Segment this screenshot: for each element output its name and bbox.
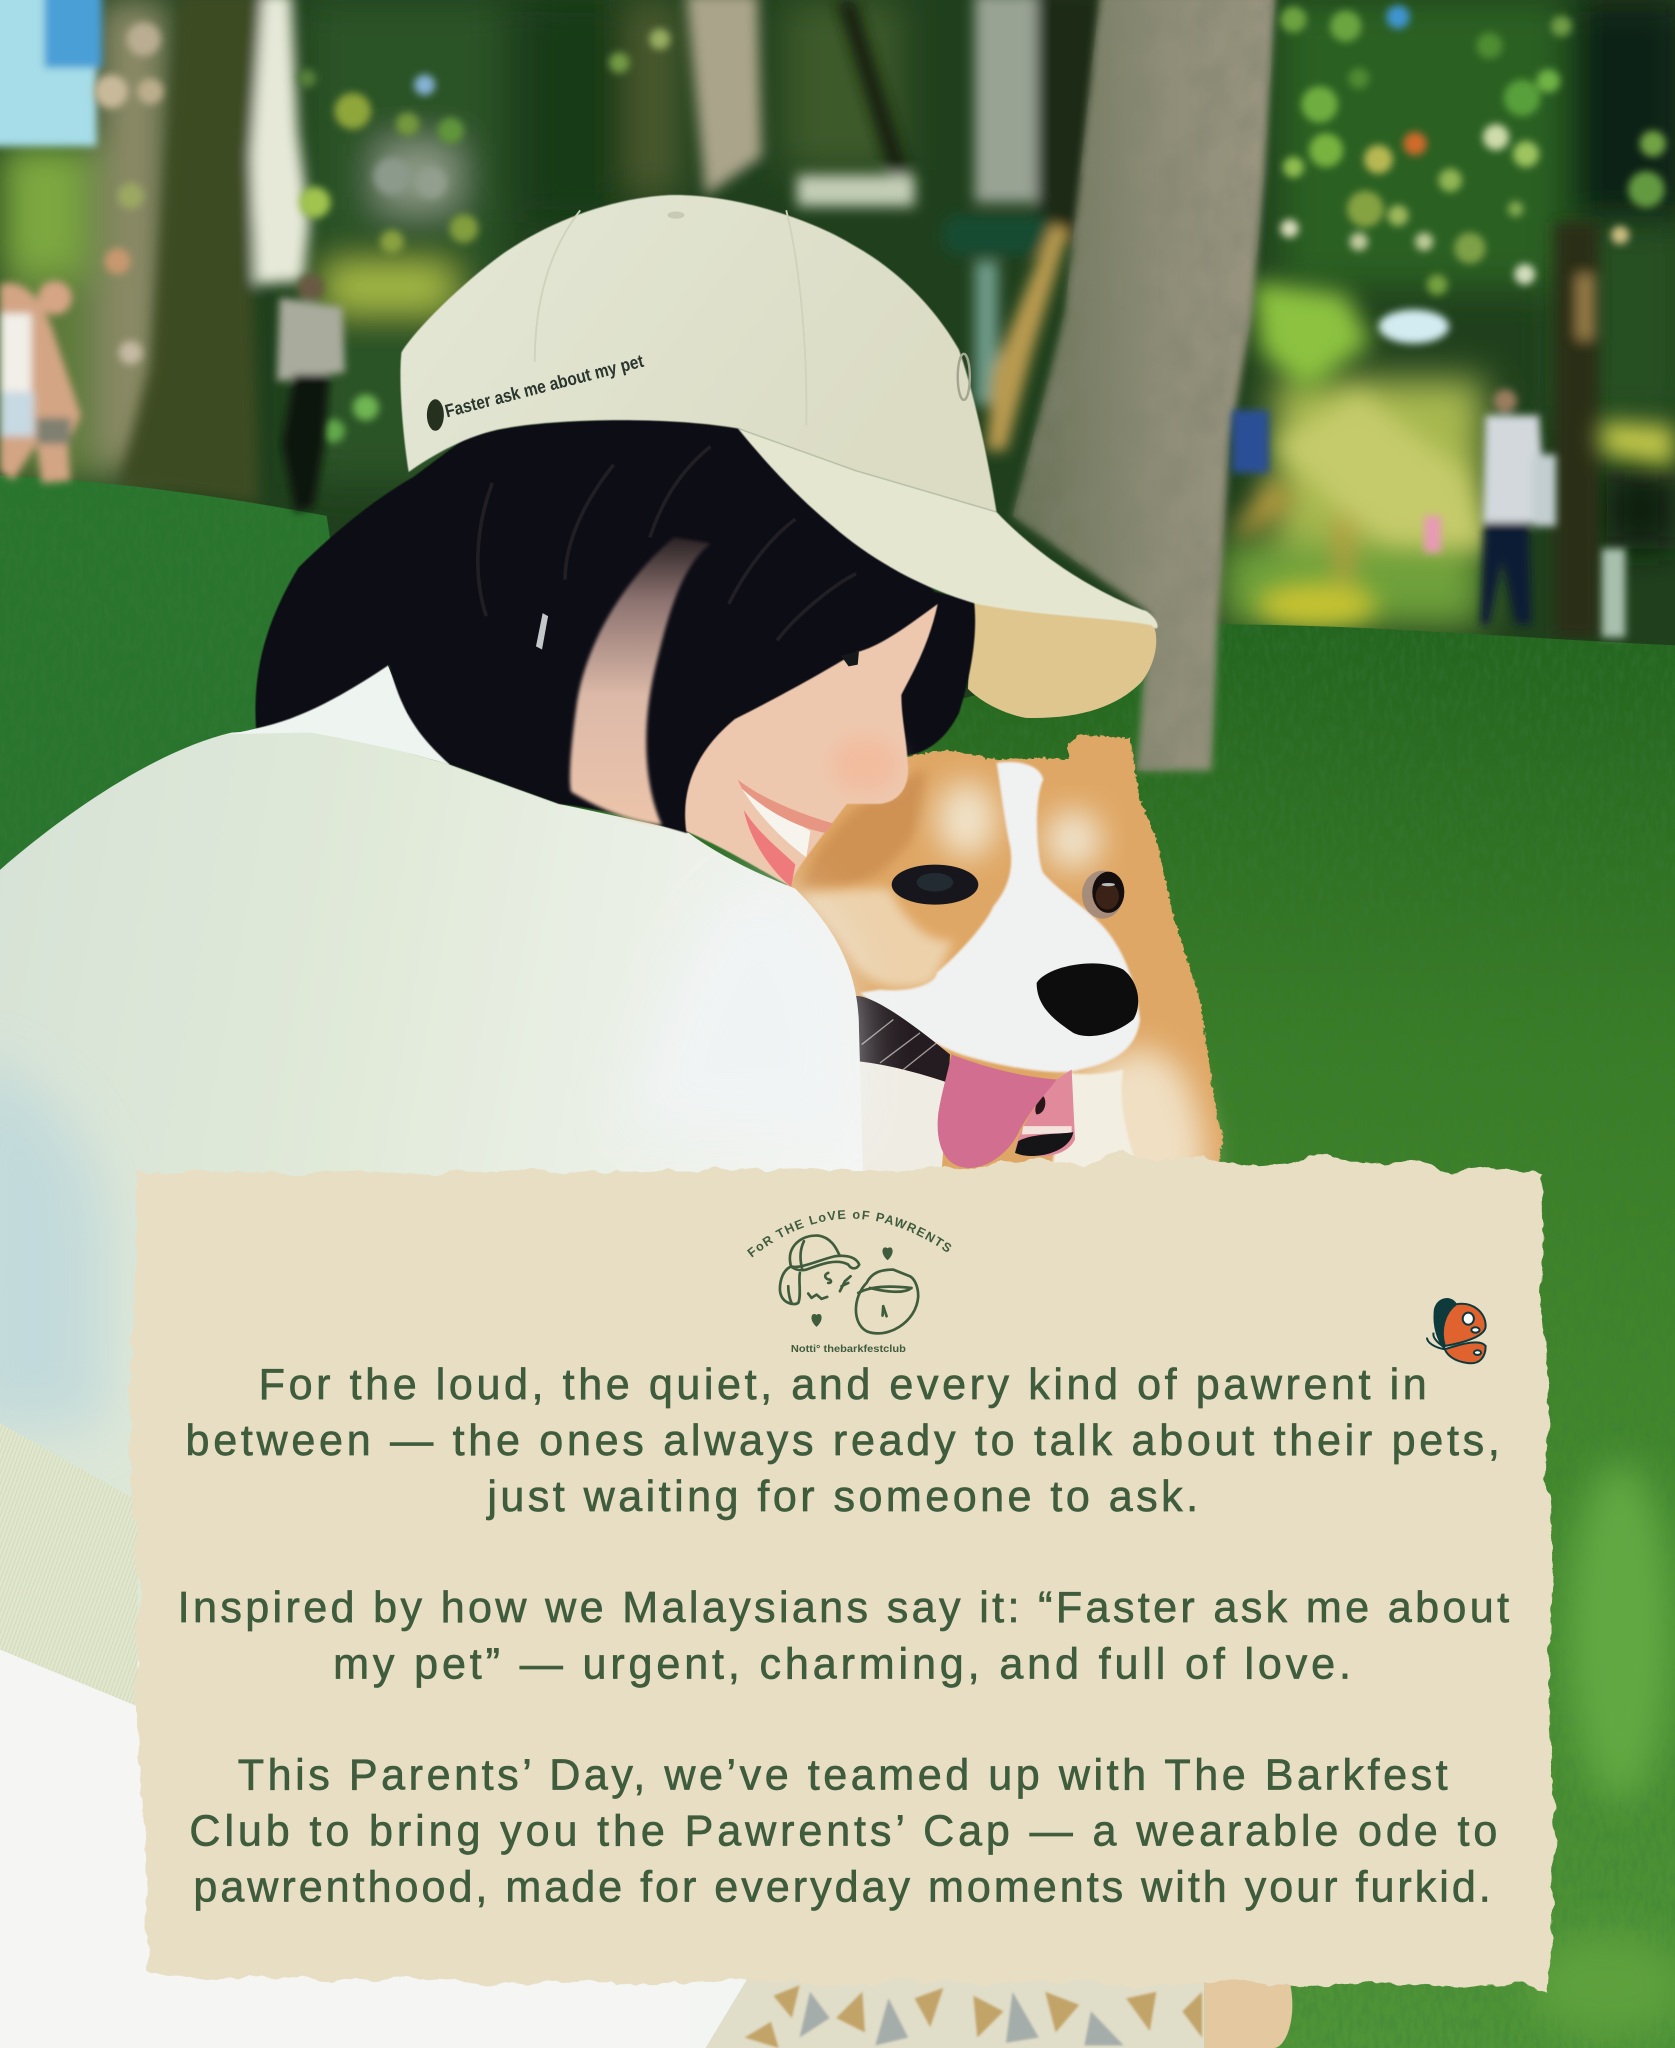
dog left eye bbox=[892, 865, 978, 905]
left grass slope bbox=[0, 475, 392, 940]
dog lower cheek bbox=[800, 889, 953, 988]
person in blue bbox=[1232, 410, 1269, 473]
collar bbox=[226, 662, 450, 765]
logo wordmark: Notti° thebarkfestclub bbox=[791, 1344, 906, 1355]
floral skirt bbox=[706, 1972, 1205, 2048]
dog chest bbox=[820, 1061, 948, 1193]
right grass slope bbox=[836, 624, 1675, 2048]
logo: For The Love of Pawrents bbox=[747, 1210, 952, 1355]
paragraph 3: Club to bring you the Pawrents’ Cap — a wearable ode to bbox=[189, 1808, 1497, 1856]
background figures bbox=[0, 274, 1625, 637]
sky patch bbox=[0, 0, 102, 146]
tree trunks bbox=[118, 0, 1599, 637]
message text bbox=[178, 1361, 1509, 1912]
cap side logo bbox=[958, 354, 970, 400]
dog white blaze bbox=[860, 762, 1140, 1072]
lit palm and undergrowth bbox=[1235, 281, 1675, 627]
dog cheek bbox=[800, 770, 927, 887]
grey trunk behind cap bbox=[975, 0, 1037, 202]
left couple bbox=[0, 281, 81, 483]
cap embroidery text: Faster ask me about my pet bbox=[443, 351, 646, 421]
dog collar bbox=[820, 993, 950, 1083]
woman bbox=[0, 195, 1158, 2048]
temple skin bbox=[570, 537, 710, 825]
lower lip bbox=[744, 810, 795, 887]
paragraph 2: my pet” — urgent, charming, and full of love. bbox=[333, 1640, 1351, 1688]
paragraph 1 bbox=[186, 1361, 1500, 1521]
hair strands bbox=[478, 447, 856, 640]
sleeve highlight bbox=[626, 883, 850, 1130]
dog rear bbox=[1205, 1972, 1292, 2048]
sky glint through leaves bbox=[1378, 310, 1449, 344]
hair silhouette bbox=[255, 419, 975, 833]
cap underbrim bbox=[968, 598, 1156, 718]
upper lip bbox=[738, 780, 833, 833]
eye bbox=[841, 651, 859, 666]
lighter grass patches bbox=[1529, 1463, 1675, 2038]
large trunk bbox=[1013, 0, 1275, 771]
paragraph 3: pawrenthood, made for everyday moments with your furkid. bbox=[193, 1864, 1491, 1912]
thin right trunk bbox=[1555, 222, 1599, 637]
logo heart bottom bbox=[811, 1314, 822, 1327]
logo heart top bbox=[882, 1247, 893, 1260]
dog lower body bbox=[1073, 1048, 1203, 1193]
paragraph 3 bbox=[189, 1751, 1497, 1912]
cap crown bbox=[400, 195, 997, 512]
shirt blue shade bbox=[0, 1058, 105, 1428]
logo curved title: FoR THE LoVE oF PAWRENTS bbox=[747, 1210, 952, 1258]
nose bbox=[832, 737, 898, 792]
paragraph 2: Inspired by how we Malaysians say it: “Faster ask me about bbox=[178, 1584, 1509, 1632]
dog nose bbox=[1037, 963, 1138, 1036]
bottom strip: skirt and dog bbox=[706, 1972, 1292, 2048]
post bbox=[1602, 549, 1625, 637]
butterfly icon bbox=[1427, 1299, 1486, 1363]
paragraph 3: This Parents’ Day, we’ve teamed up with The Barkfest bbox=[238, 1751, 1448, 1799]
shirt bbox=[0, 728, 863, 2048]
dog open mouth bbox=[1015, 1070, 1075, 1156]
hair clip glint bbox=[536, 613, 548, 649]
paragraph 1: For the loud, the quiet, and every kind of pawrent in bbox=[259, 1361, 1427, 1409]
left trunk bbox=[118, 0, 263, 503]
dog whiskers bbox=[862, 1020, 937, 1070]
torn paper bbox=[129, 1149, 1556, 1992]
paragraph 1: just waiting for someone to ask. bbox=[485, 1473, 1198, 1521]
bokeh highlights bbox=[94, 5, 1666, 443]
sign and post bbox=[943, 216, 1050, 255]
right figure bbox=[1424, 389, 1556, 624]
cap embroidered badge bbox=[427, 399, 444, 431]
centre figure bbox=[277, 274, 345, 512]
paper note bbox=[128, 1150, 1558, 1993]
yellow branch bbox=[986, 225, 1069, 451]
dog bbox=[787, 735, 1223, 1193]
white lower shirt bbox=[0, 1646, 689, 2048]
dog right eye bbox=[1082, 871, 1124, 919]
grass texture bbox=[962, 625, 1675, 2044]
dog brow right bbox=[1045, 810, 1102, 870]
skirt pattern bbox=[745, 1985, 1202, 2048]
distant foliage bbox=[0, 0, 1675, 627]
knit hem bbox=[0, 1422, 138, 1707]
paragraph 2 bbox=[178, 1584, 1509, 1688]
face bbox=[685, 604, 938, 886]
dog chest right bbox=[1047, 1070, 1147, 1193]
white trunk bbox=[251, 0, 310, 285]
logo illustration: woman and dog bbox=[780, 1236, 918, 1333]
trunk bark texture bbox=[1013, 0, 1280, 771]
dog tongue bbox=[938, 1055, 1057, 1168]
dog brow left bbox=[937, 781, 997, 858]
paragraph 1: between — the ones always ready to talk about their pets, bbox=[186, 1417, 1500, 1465]
cap seams bbox=[535, 210, 806, 425]
teeth bbox=[742, 789, 810, 857]
middle trunk bbox=[686, 0, 762, 196]
cap brim bbox=[738, 428, 1158, 628]
cap top button bbox=[667, 211, 684, 219]
dog fur bbox=[787, 735, 1223, 1193]
